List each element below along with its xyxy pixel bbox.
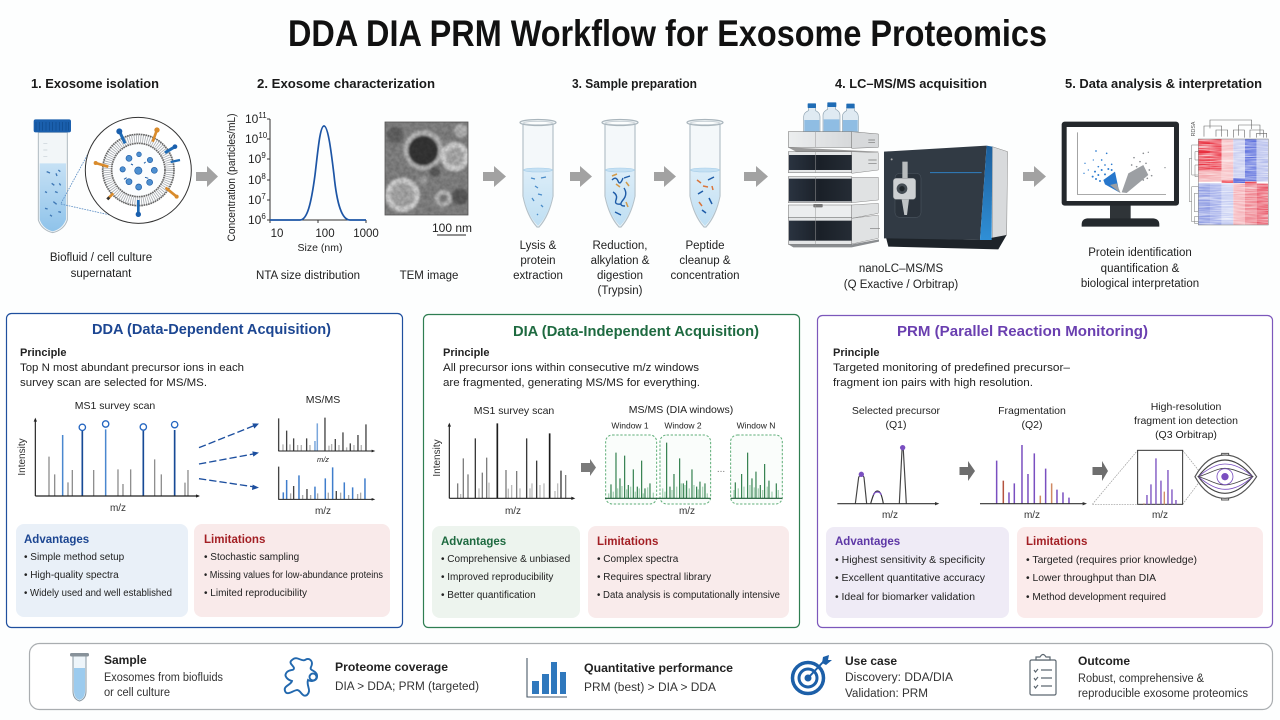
caption: nanoLC: (Q Exactive / Orbitrap) [844,279,958,291]
summary: use case: Discovery: DDA/DIA [845,672,953,684]
icon: monitor with volcano plot [1062,122,1179,227]
box: PRM advantages [826,527,1009,618]
chart: DIA windows: Window 2 [664,420,702,430]
heading: PRM: PRM (Parallel Reaction Monitoring) [897,323,1148,340]
chart: NTA size distribution: 8 [261,172,266,181]
caption: nanoLC [844,263,958,291]
chart: fragmentation: m/z [1024,510,1040,521]
chart: NTA size distribution: Concentration (particles/mL) [226,114,238,242]
summary: sample [70,653,223,701]
summary: outcome: Robust, comprehensive & [1078,673,1204,685]
title: DDA DIA PRM Workflow for Exosome Proteomics [288,13,1047,54]
image: TEM [385,122,470,215]
icon: exosome diagram [85,117,191,223]
summary: sample: Sample [104,653,147,667]
caption: TEM: TEM image [400,270,458,282]
chart: high-resolution detection: High-resolution [1151,401,1221,413]
step 3: sample preparation [513,76,740,297]
icon: cleanup tube [687,120,723,227]
icon: clipboard [1030,654,1056,695]
caption: lysis: Lysis & [520,240,557,252]
chart: DIA windows: m/z [679,506,695,517]
summary: use case: Validation: PRM [845,688,928,700]
chart: NTA size distribution: 10 [248,193,261,207]
box: DDA advantages [16,524,188,617]
chart: MS1 survey scan: Intensity [17,438,28,476]
chart: heatmap [1189,120,1268,225]
box: DIA limitations: Limitations [597,536,658,548]
heading: DDA: DDA (Data-Dependent Acquisition) [92,321,331,338]
text: PRM principle: fragment ion pairs with high resolution. [833,377,1033,389]
caption: cleanup: cleanup & [679,255,731,267]
box: DDA limitations: • Missing values for low-abundance proteins [204,570,383,581]
icon: digestion tube [602,120,638,227]
icon: sample tube [34,119,110,233]
heading: step 4: 4. LC–MS/MS acquisition [835,76,987,91]
chart: high-resolution detection: fragment ion detection [1134,415,1238,427]
arrow: MS1 to DIA windows [581,459,596,476]
chart: NTA size distribution: 7 [261,192,266,201]
chart: NTA size distribution: 11 [258,111,267,120]
chart: DIA MS1 scan: MS1 survey scan [474,405,554,417]
chart: MS1 survey scan: MS1 survey scan [75,400,155,412]
caption: lysis [513,240,563,282]
icon: lysis tube [520,120,556,227]
chart: NTA size distribution: 10 [258,131,268,140]
chart: high-resolution detection [1092,401,1238,521]
icon: protein blob [285,658,317,696]
arrow: Q2 to Q3 [1092,461,1108,481]
caption: cleanup: Peptide [685,240,725,252]
heading: step 5: 5. Data analysis & interpretation [1065,76,1262,91]
chart: high-resolution detection: m/z [1152,510,1168,521]
box: DIA limitations [588,526,789,618]
caption: biofluid [50,252,152,280]
chart: DIA MS1 scan: Intensity [432,439,443,477]
panel: DDA [6,314,402,628]
chart: selected precursor [837,405,941,521]
chart: DIA MS1 scan: m/z [505,506,521,517]
summary bar [30,644,1272,710]
caption: digestion: (Trypsin) [598,285,643,297]
summary: quantitative performance [527,658,733,697]
chart: fragmentation [980,405,1087,521]
box: DIA advantages: Advantages [441,536,506,548]
arrow: Q1 to Q2 [960,461,975,481]
box: DDA advantages: • Widely used and well established [24,588,172,599]
caption: data analysis: Protein identification [1088,247,1192,259]
caption: data analysis: biological interpretation [1081,278,1199,290]
chart: NTA size distribution: 1000 [353,228,379,240]
text: DDA principle [20,347,244,389]
caption: cleanup [670,240,740,282]
summary: outcome: reproducible exosome proteomics [1078,688,1248,700]
arrows: precursor selection [199,423,259,490]
icon: bars [527,658,567,697]
step 2: exosome characterization [226,76,472,282]
caption: NTA: NTA size distribution [256,270,360,282]
summary: proteome coverage [285,658,479,696]
chart: NTA size distribution: Size (nm) [298,242,342,254]
text: DIA principle [443,347,700,389]
arrow: 4 to 5 [1023,166,1046,187]
caption: biofluid: Biofluid / cell culture [50,252,152,264]
chart: MS/MS spectra: MS/MS [306,394,340,406]
summary: proteome coverage: DIA > DDA; PRM (targeted) [335,681,479,693]
heading: step 1: 1. Exosome isolation [31,76,159,91]
caption: data analysis [1081,247,1199,290]
caption: biofluid: supernatant [71,268,132,280]
chart: selected precursor: m/z [882,510,898,521]
chart: MS1 survey scan [17,400,200,514]
panel: PRM [818,316,1272,628]
box: DDA advantages: Advantages [24,534,89,546]
box: DIA advantages [432,526,580,618]
chart: heatmap: RDSA [1191,121,1197,136]
chart: selected precursor: (Q1) [886,419,906,431]
chart: high-resolution detection: (Q3 Orbitrap) [1155,429,1217,441]
caption: lysis: extraction [513,270,563,282]
caption: nanoLC: nanoLC–MS/MS [859,263,944,275]
chart: NTA size distribution: 10 [248,152,261,166]
summary: outcome [1030,654,1248,700]
chart: MS1 survey scan: m/z [110,503,126,514]
caption: digestion: alkylation & [591,255,650,267]
icon: mass spectrometer [884,146,1008,249]
icon: target [792,655,832,694]
step 5: data analysis [1062,76,1268,290]
step 4: LC-MS/MS acquisition [788,76,1008,291]
icon: LC stack [788,132,880,247]
summary: sample: Exosomes from biofluids [104,672,223,684]
chart: fragmentation: Fragmentation [998,405,1066,417]
text: DDA principle: survey scan are selected for MS/MS. [20,377,207,389]
heading: step 2: 2. Exosome characterization [257,76,435,91]
chart: NTA size distribution: 100 [315,228,335,240]
chart: NTA size distribution: 10 [271,228,283,240]
box: DIA advantages: • Comprehensive & unbiased [441,554,570,565]
heading: DIA: DIA (Data-Independent Acquisition) [513,323,759,340]
heading: step 3: 3. Sample preparation [572,76,697,91]
arrow: 1 to 2 [196,166,218,187]
panel: DIA [424,314,800,628]
chart: fragmentation: (Q2) [1022,419,1042,431]
box: DIA limitations: • Requires spectral library [597,572,711,583]
box: PRM limitations: Limitations [1026,536,1087,548]
chart: selected precursor: Selected precursor [852,405,941,417]
caption: lysis: protein [520,255,556,267]
chart: NTA size distribution: 10 [248,173,261,187]
box: DDA limitations [194,524,390,617]
chart: NTA size distribution [226,111,379,254]
icon: Orbitrap [1195,453,1257,500]
box: PRM limitations: • Targeted (requires prior knowledge) [1026,555,1197,566]
chart: MS/MS spectra: m/z [317,455,329,464]
summary: quantitative performance: PRM (best) > DIA > DDA [584,682,716,694]
caption: cleanup: concentration [670,270,740,282]
box: PRM advantages: • Highest sensitivity & specificity [835,555,985,566]
chart: DIA MS1 scan [432,405,575,517]
arrow: 3 to 4 [744,166,768,187]
caption: digestion: Reduction, [593,240,647,252]
box: PRM limitations [1017,527,1263,618]
chart: DIA windows: Window N [737,420,775,430]
chart: MS/MS spectra: m/z [315,506,331,517]
chart: DIA windows: Window 1 [611,420,649,430]
box: DDA limitations: • Limited reproducibility [204,588,307,599]
box: DDA limitations: Limitations [204,534,265,546]
text: PRM principle [833,347,1071,389]
text: PRM principle: Targeted monitoring of predefined precursor– [833,362,1071,374]
step 1: exosome isolation [31,76,191,280]
chart: NTA size distribution: 10 [245,132,258,146]
text: DIA principle: Principle [443,347,489,359]
box: PRM advantages: Advantages [835,536,900,548]
box: PRM advantages: • Excellent quantitative accuracy [835,573,985,584]
box: DIA limitations: • Complex spectra [597,554,679,565]
arrow: 2 to 3 [483,166,506,187]
chart: MS/MS spectra [278,394,375,517]
text: DDA principle: Principle [20,347,66,359]
summary: quantitative performance: Quantitative performance [584,661,733,675]
scale bar: 100 nm [432,221,472,235]
caption: digestion: digestion [597,270,643,282]
box: DDA advantages: • Simple method setup [24,552,125,563]
icon: solvent bottles [804,102,858,132]
summary: sample: or cell culture [104,687,170,699]
summary: outcome: Outcome [1078,654,1130,668]
caption: data analysis: quantification & [1101,263,1180,275]
summary: use case: Use case [845,654,897,668]
chart: DIA windows: ... [717,464,725,475]
box: DIA limitations: • Data analysis is computationally intensive [597,590,780,601]
box: PRM limitations: • Lower throughput than DIA [1026,573,1156,584]
chart: NTA size distribution: 10 [245,112,258,126]
arrow: lysis to digestion [570,166,592,187]
box: PRM advantages: • Ideal for biomarker validation [835,592,975,603]
text: DIA principle: are fragmented, generating MS/MS for everything. [443,377,700,389]
chart: NTA size distribution: 10 [248,213,261,227]
text: DIA principle: All precursor ions within consecutive m/z windows [443,362,700,374]
box: DDA advantages: • High-quality spectra [24,570,119,581]
text: DDA principle: Top N most abundant precursor ions in each [20,362,244,374]
box: DDA limitations: • Stochastic sampling [204,552,299,563]
arrow: digestion to cleanup [654,166,676,187]
icon: sample tube [70,653,89,701]
text: PRM principle: Principle [833,347,879,359]
chart: DIA windows: MS/MS (DIA windows) [629,404,733,416]
summary: proteome coverage: Proteome coverage [335,660,448,674]
box: PRM limitations: • Method development required [1026,592,1166,603]
summary: use case [792,654,953,700]
chart: NTA size distribution: 9 [261,151,266,160]
box: DIA advantages: • Better quantification [441,590,536,601]
box: DIA advantages: • Improved reproducibility [441,572,553,583]
chart: DIA windows [605,404,782,517]
chart: NTA size distribution: 6 [261,212,266,221]
caption: digestion [591,240,650,297]
